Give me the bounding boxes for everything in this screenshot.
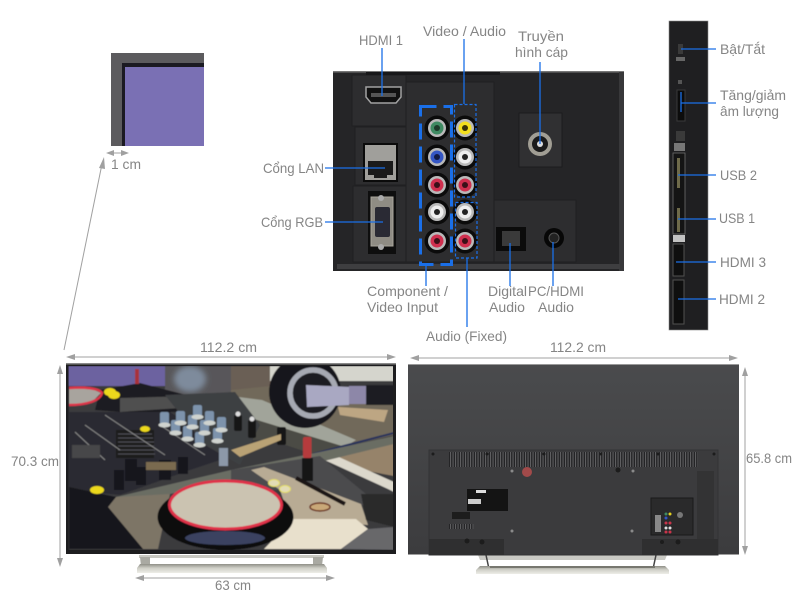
photo: TV front view [66,356,396,573]
mixer body [69,412,235,495]
dimension: rear height: 65.8 cm [746,450,792,466]
TV stand [137,555,327,573]
port: LAN [363,143,398,182]
highlight: audio fixed group [456,202,477,258]
label: Component / Video Input: Component / [367,283,448,299]
label: Truyền hình cáp: Truyền [518,28,564,44]
label: Bật/Tắt [681,41,765,57]
ports: RCA column 2 [452,116,478,254]
label: Truyền hình cáp: hình cáp [515,44,568,60]
label: Component / Video Input: Video Input [367,299,438,315]
ports: RCA column 1 [424,116,450,254]
black knobs [234,415,286,445]
dimension: front height: 70.3 cm [11,453,59,469]
arrow: detail to TV corner [64,157,105,350]
label: PC/HDMI Audio: PC/HDMI [528,283,584,299]
top right beige [340,444,393,476]
yellow buttons [90,388,150,494]
label: Digital Audio: Audio [489,299,525,315]
dimension: 1 cm bezel [106,150,141,172]
dimension: stand width: 63 cm [215,577,251,593]
turntable [95,382,182,412]
label: Video / Audio: Video / Audio [423,23,506,39]
rear stand [476,555,669,574]
label: USB 2: USB 2 [720,167,757,183]
beige strip [231,434,281,457]
panel: rear connector photo [333,71,624,271]
headphones [268,366,341,428]
highlight: video audio group [454,104,476,197]
metal knob [219,448,228,466]
rear connector box [651,498,693,535]
label: USB 2 [678,167,757,183]
dimension: 1 cm bezel: 1 cm [111,156,141,172]
USB slots [673,153,685,234]
label sticker [467,489,508,511]
mount screws [432,452,716,544]
deck bar [118,436,393,498]
vents [449,452,698,467]
rear shell [408,364,739,554]
label: Audio (Fixed) [426,258,507,344]
port: digital audio [496,227,526,251]
label: Component / Video Input [367,265,448,315]
photo: TV rear view [408,364,739,574]
label: Video / Audio [423,23,506,104]
label: Truyền hình cáp [515,28,568,144]
label: USB 1: USB 1 [719,210,755,226]
label: Tăng/giảm âm lượng [681,87,786,119]
dimension: rear width: 112.2 cm [550,339,606,355]
label: Tăng/giảm âm lượng: âm lượng [720,103,779,119]
backdrop top [68,366,175,386]
fader strip [296,478,345,504]
label: Digital Audio: Digital [488,283,527,299]
label: PC/HDMI Audio: Audio [538,299,574,315]
dimension: front width [66,339,396,360]
knobs [160,405,226,445]
label: Tăng/giảm âm lượng: Tăng/giảm [720,87,786,103]
jog wheel [157,498,294,550]
port: VGA RGB [368,191,396,254]
small vent [449,524,474,529]
label: PC/HDMI Audio [528,242,584,315]
warning badge [522,467,532,477]
label: Cổng RGB [261,214,383,230]
screen image: DJ mixer [68,356,394,550]
label: Cổng RGB: Cổng RGB [261,214,323,230]
port: PC/HDMI audio [544,228,564,248]
dimension: front height [11,365,63,567]
panel: bezel corner detail [111,53,204,146]
port: HDMI 1 [366,87,401,103]
label: HDMI 3: HDMI 3 [720,254,766,270]
panel: side button and port photo [669,21,708,330]
black switches [114,457,188,490]
label: HDMI 1 [359,32,403,96]
label: Cổng LAN [263,160,385,176]
TV frame [66,363,396,554]
silver deck [231,456,366,506]
dimension: stand width [135,575,335,593]
label: Cổng LAN: Cổng LAN [263,160,324,176]
lower rear housing [429,450,718,555]
dimension: rear height [742,367,792,555]
port: coaxial cable TV [528,132,552,156]
label: HDMI 1: HDMI 1 [359,32,403,48]
label: HDMI 3 [676,254,766,270]
label: HDMI 2 [678,291,765,307]
screen corner [125,67,204,146]
highlight: component video input [420,106,452,264]
glass panel [231,396,356,447]
label: USB 1 [678,210,755,226]
label: HDMI 2: HDMI 2 [719,291,765,307]
label: Bật/Tắt: Bật/Tắt [720,41,765,57]
label: Digital Audio [488,243,527,315]
red fader [303,437,312,458]
dimension: rear width [410,339,738,361]
HDMI slots [673,244,684,276]
dimension: front width: 112.2 cm [200,339,257,355]
label: Audio (Fixed): Audio (Fixed) [426,328,507,344]
